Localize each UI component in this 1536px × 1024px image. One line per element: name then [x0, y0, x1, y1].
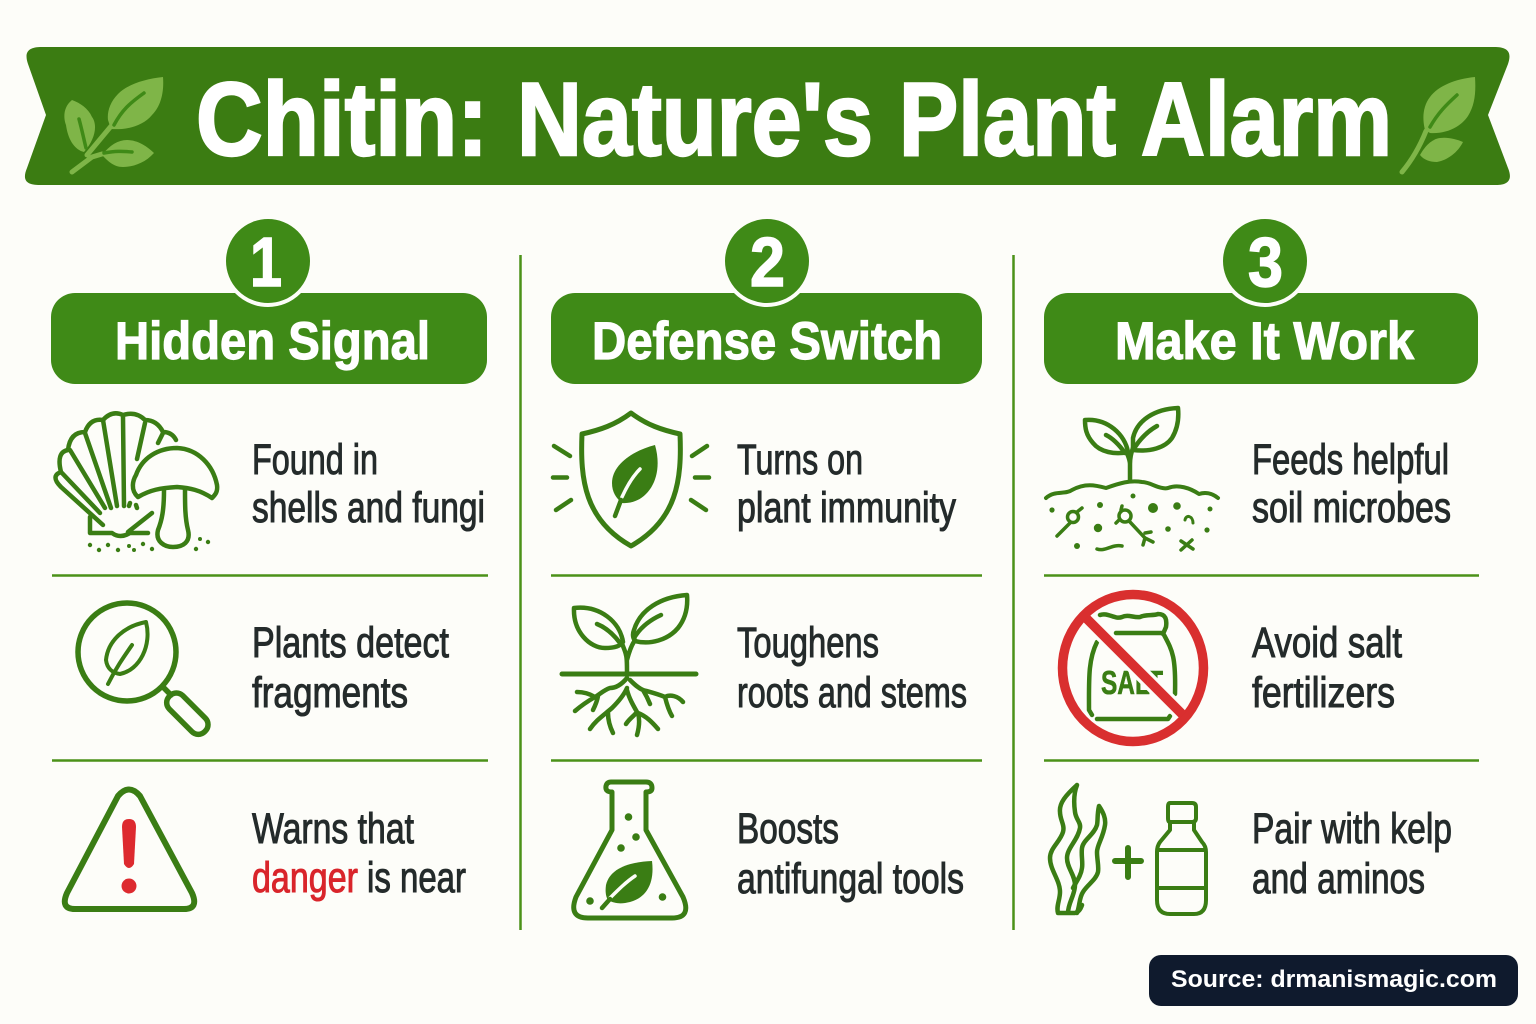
text: Feeds helpful soil microbes: [1252, 436, 1451, 532]
text: Avoid salt fertilizers: fertilizers: [1252, 669, 1395, 717]
heading: Defense Switch: Defense Switch: [592, 312, 942, 371]
source badge: Source: drmanismagic.com: [1171, 966, 1497, 993]
title banner: [25, 47, 1510, 185]
text: Feeds helpful soil microbes: Feeds helpful: [1252, 436, 1449, 484]
text: Boosts antifungal tools: antifungal tools: [737, 855, 964, 903]
text: Found in shells and fungi: shells and fungi: [252, 484, 485, 532]
title: Plant: [899, 62, 1116, 178]
heading: Hidden Signal: 1: [250, 223, 282, 301]
heading: Make It Work: [1044, 217, 1478, 384]
text: Plants detect fragments: fragments: [252, 669, 408, 717]
source badge: [1149, 955, 1518, 1006]
panel: column 2 Defense Switch: [551, 217, 982, 918]
text: Toughens roots and stems: Toughens: [737, 619, 879, 667]
text: Found in shells and fungi: [252, 436, 485, 532]
text: Toughens roots and stems: roots and stems: [737, 669, 967, 717]
text: Avoid salt fertilizers: [1252, 619, 1402, 717]
icon: sprout with roots: [562, 595, 696, 735]
icon: seedling and soil microbes: [1046, 408, 1218, 550]
title: [196, 62, 1392, 178]
text: Turns on plant immunity: plant immunity: [737, 484, 956, 532]
icon: shell and mushroom: [56, 413, 217, 552]
text: Pair with kelp and aminos: Pair with kelp: [1252, 805, 1452, 853]
heading: Hidden Signal: [51, 217, 487, 384]
text: Warns that danger is near: Warns that: [252, 805, 414, 853]
panel: column 1 Hidden Signal: [51, 217, 488, 909]
text: Toughens roots and stems: [737, 619, 967, 717]
heading: Make It Work: 3: [1248, 223, 1283, 301]
icon: flask with leaf: [574, 782, 686, 918]
heading: Hidden Signal: Hidden Signal: [115, 312, 430, 371]
text: Avoid salt fertilizers: Avoid salt: [1252, 619, 1402, 667]
icon: no salt fertilizer: SALT: [1101, 664, 1163, 701]
icon: kelp plus bottle: [1050, 785, 1206, 914]
icon: left leaf sprig: [64, 77, 163, 172]
icon: no salt fertilizer: [1062, 594, 1204, 742]
text: Boosts antifungal tools: [737, 805, 964, 903]
panel: column 3 Make It Work: [1044, 217, 1479, 914]
text: Boosts antifungal tools: Boosts: [737, 805, 839, 853]
icon: right leaf sprig: [1402, 77, 1475, 172]
title: Alarm: [1141, 62, 1392, 178]
title: Chitin:: [196, 62, 488, 178]
heading: Defense Switch: [551, 217, 982, 384]
title: Nature's: [517, 62, 873, 178]
text: Turns on plant immunity: [737, 436, 956, 532]
text: Warns that danger is near: danger: [252, 854, 358, 902]
icon: warning triangle: [65, 790, 194, 909]
column dividers: [520, 255, 1014, 930]
text: Pair with kelp and aminos: [1252, 805, 1452, 903]
text: Feeds helpful soil microbes: soil microbes: [1252, 484, 1451, 532]
text: Pair with kelp and aminos: and aminos: [1252, 855, 1425, 903]
heading: Defense Switch: 2: [750, 223, 785, 301]
text: Warns that danger is near: [252, 805, 466, 902]
text: Found in shells and fungi: Found in: [252, 436, 378, 484]
text: Plants detect fragments: [252, 619, 449, 717]
icon: shield with leaf: [553, 413, 709, 546]
text: Plants detect fragments: Plants detect: [252, 619, 449, 667]
heading: Make It Work: Make It Work: [1115, 312, 1414, 371]
icon: magnifying glass with leaf: [78, 603, 212, 738]
text: Warns that danger is near: is near: [367, 854, 466, 902]
text: Turns on plant immunity: Turns on: [737, 436, 863, 484]
